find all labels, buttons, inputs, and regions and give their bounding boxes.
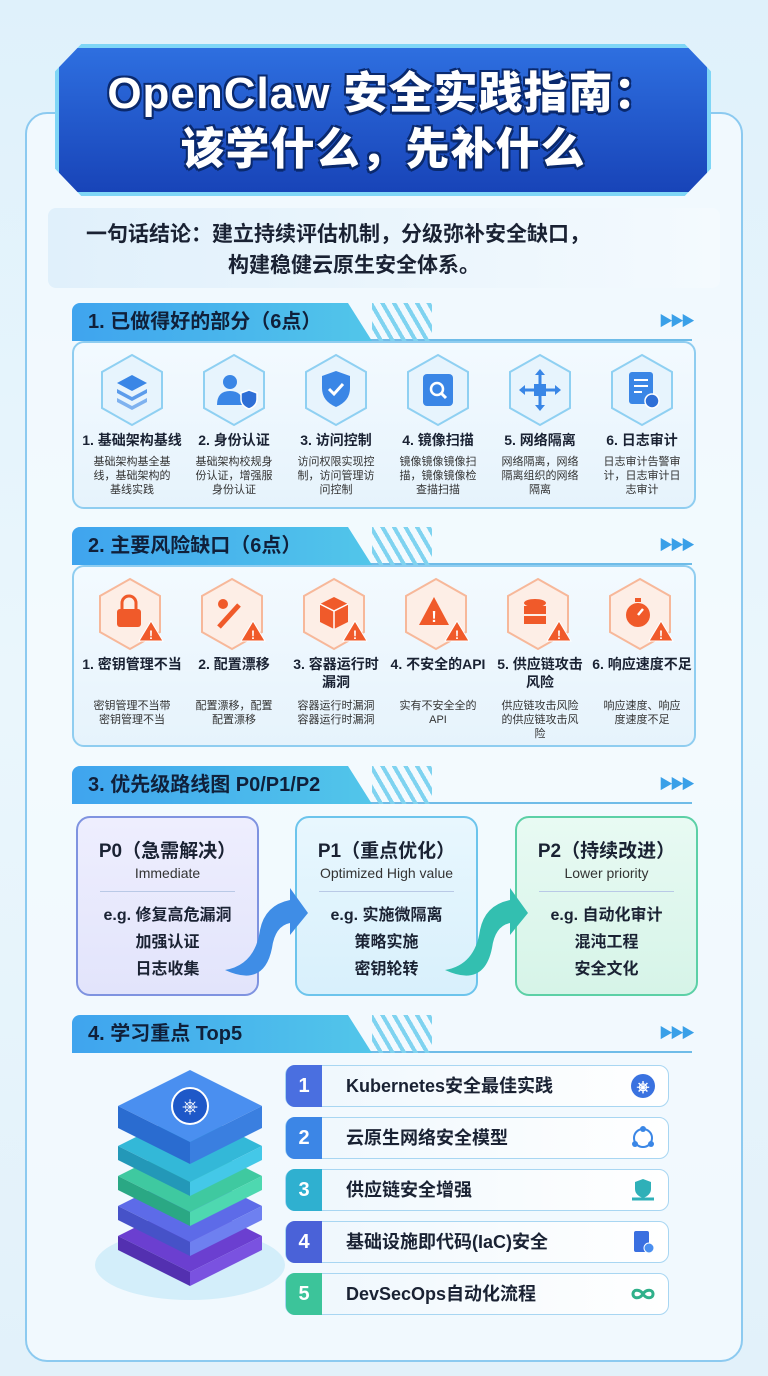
item: identity: [196, 354, 272, 496]
item: baseline: [82, 354, 182, 496]
section 1 header: 1. 已做得好的部分（6点）: [88, 311, 321, 333]
item: baseline: 1. 基础架构基线: [82, 432, 182, 448]
list item 5: [285, 1273, 669, 1315]
item: container runtime: 漏洞: [322, 674, 350, 690]
item: key mgmt: 1. 密钥管理不当: [82, 656, 182, 672]
illustration: server stack: [95, 1070, 285, 1300]
section 3 header: ▶▶▶: [659, 776, 692, 792]
item: access control: 3. 访问控制: [300, 432, 372, 448]
item: supply chain: 风险: [526, 674, 554, 690]
section 2 header: ▶▶▶: [659, 537, 692, 553]
panel: P1: e.g. 实施微隔离: [330, 907, 442, 924]
list item 4: [285, 1221, 669, 1263]
item: identity: 2. 身份认证: [198, 432, 270, 448]
list item 2: 2: [298, 1127, 310, 1149]
item: baseline: 基础架构基全基线，基础架构的基线实践: [94, 456, 170, 496]
panel: P0: P0（急需解决）: [99, 841, 236, 862]
item: container runtime: [293, 578, 379, 726]
item: config drift: 配置漂移，配置配置漂移: [196, 700, 272, 726]
section 2 header: 2. 主要风险缺口（6点）: [88, 535, 301, 557]
illustration: server stack: ⎈: [182, 1096, 198, 1118]
item: container runtime: 3. 容器运行时: [293, 656, 379, 672]
panel: P0: 加强认证: [135, 934, 200, 951]
item: access control: [298, 354, 374, 496]
panel: risks: [72, 565, 696, 747]
panel: P0: [76, 816, 259, 996]
section 4 header: ▶▶▶: [659, 1025, 692, 1041]
panel: P2: Lower priority: [564, 865, 649, 881]
item: image scan: 4. 镜像扫描: [402, 432, 474, 448]
list item 1: ⎈: [637, 1079, 650, 1096]
item: identity: 基础架构校规身份认证，增强服身份认证: [196, 456, 272, 496]
item: container runtime: !: [353, 628, 357, 642]
item: image scan: 镜像镜像镜像扫描，镜像镜像检查描扫描: [400, 456, 476, 496]
item: config drift: !: [251, 628, 255, 642]
title banner: [55, 44, 711, 196]
list item 5: 5: [298, 1283, 310, 1305]
section 1 header: [72, 303, 692, 341]
item: network isolation: 网络隔离，网络隔离组织的网络隔离: [502, 456, 578, 496]
panel: P2: 混沌工程: [574, 934, 638, 951]
item: insecure api: !: [431, 609, 437, 626]
arrow: P1 to P2: [445, 888, 528, 976]
panel: P2: 安全文化: [574, 961, 638, 978]
panel: P2: e.g. 自动化审计: [550, 907, 662, 924]
panel: P1: Optimized High value: [320, 865, 453, 881]
list item 4: 4: [298, 1231, 310, 1253]
item: insecure api: !: [455, 628, 459, 642]
title banner: OpenClaw 安全实践指南：: [107, 69, 659, 118]
list item 3: [285, 1169, 669, 1211]
list item 3: 3: [298, 1179, 310, 1201]
item: image scan: [400, 354, 476, 496]
list item 5: DevSecOps自动化流程: [346, 1284, 536, 1304]
list item 2: 云原生网络安全模型: [346, 1128, 508, 1148]
list item 1: Kubernetes安全最佳实践: [346, 1076, 553, 1096]
list item 1: [285, 1065, 669, 1107]
panel: P2: P2（持续改进）: [538, 841, 675, 862]
title banner: 该学什么，先补什么: [180, 125, 586, 174]
item: response speed: [592, 578, 692, 726]
section 3 header: [72, 766, 692, 804]
item: container runtime: 容器运行时漏洞容器运行时漏洞: [298, 700, 374, 726]
item: response speed: 6. 响应速度不足: [592, 656, 692, 672]
item: config drift: 2. 配置漂移: [198, 656, 270, 672]
list item 2: [285, 1117, 669, 1159]
item: insecure api: [390, 578, 485, 726]
item: supply chain: 供应链攻击风险的供应链攻击风险: [502, 700, 578, 740]
section 1 header: ▶▶▶: [659, 313, 692, 329]
section 3 header: 3. 优先级路线图 P0/P1/P2: [88, 774, 320, 796]
item: key mgmt: 密钥管理不当带密钥管理不当: [94, 700, 170, 726]
panel: P0: Immediate: [135, 865, 200, 881]
arrow: P0 to P1: [225, 888, 308, 976]
conclusion callout: [48, 208, 720, 288]
item: response speed: !: [659, 628, 663, 642]
item: access control: 访问权限实现控制，访问管理访问控制: [298, 456, 374, 496]
item: insecure api: 实有不安全全的API: [400, 700, 476, 726]
item: config drift: [196, 578, 272, 726]
item: audit log: 日志审计告警审计，日志审计日志审计: [604, 456, 680, 496]
panel: P2: [515, 816, 698, 996]
item: response speed: 响应速度、响应度速度不足: [604, 700, 680, 726]
item: supply chain: [497, 578, 583, 740]
item: audit log: 6. 日志审计: [606, 432, 678, 448]
panel: P0: e.g. 修复高危漏洞: [103, 907, 232, 924]
panel: strengths: [72, 341, 696, 509]
item: key mgmt: !: [149, 628, 153, 642]
item: network isolation: 5. 网络隔离: [504, 432, 576, 448]
section 2 header: [72, 527, 692, 565]
conclusion callout: 构建稳健云原生安全体系。: [228, 254, 480, 277]
item: network isolation: [502, 354, 578, 496]
list item 3: 供应链安全增强: [346, 1180, 472, 1200]
panel: P1: 策略实施: [354, 934, 418, 951]
panel: P0: 日志收集: [135, 961, 200, 978]
item: audit log: [604, 354, 680, 496]
conclusion callout: 一句话结论：建立持续评估机制，分级弥补安全缺口，: [86, 223, 590, 246]
section 4 header: [72, 1015, 692, 1053]
list item 1: 1: [298, 1075, 310, 1097]
item: supply chain: 5. 供应链攻击: [497, 656, 583, 672]
panel: P1: 密钥轮转: [354, 961, 418, 978]
item: insecure api: 4. 不安全的API: [391, 656, 485, 672]
item: supply chain: !: [557, 628, 561, 642]
panel: P1: [295, 816, 478, 996]
item: key mgmt: [82, 578, 182, 726]
list item 4: 基础设施即代码(IaC)安全: [346, 1232, 548, 1252]
section 4 header: 4. 学习重点 Top5: [88, 1023, 242, 1045]
panel: P1: P1（重点优化）: [318, 841, 455, 862]
